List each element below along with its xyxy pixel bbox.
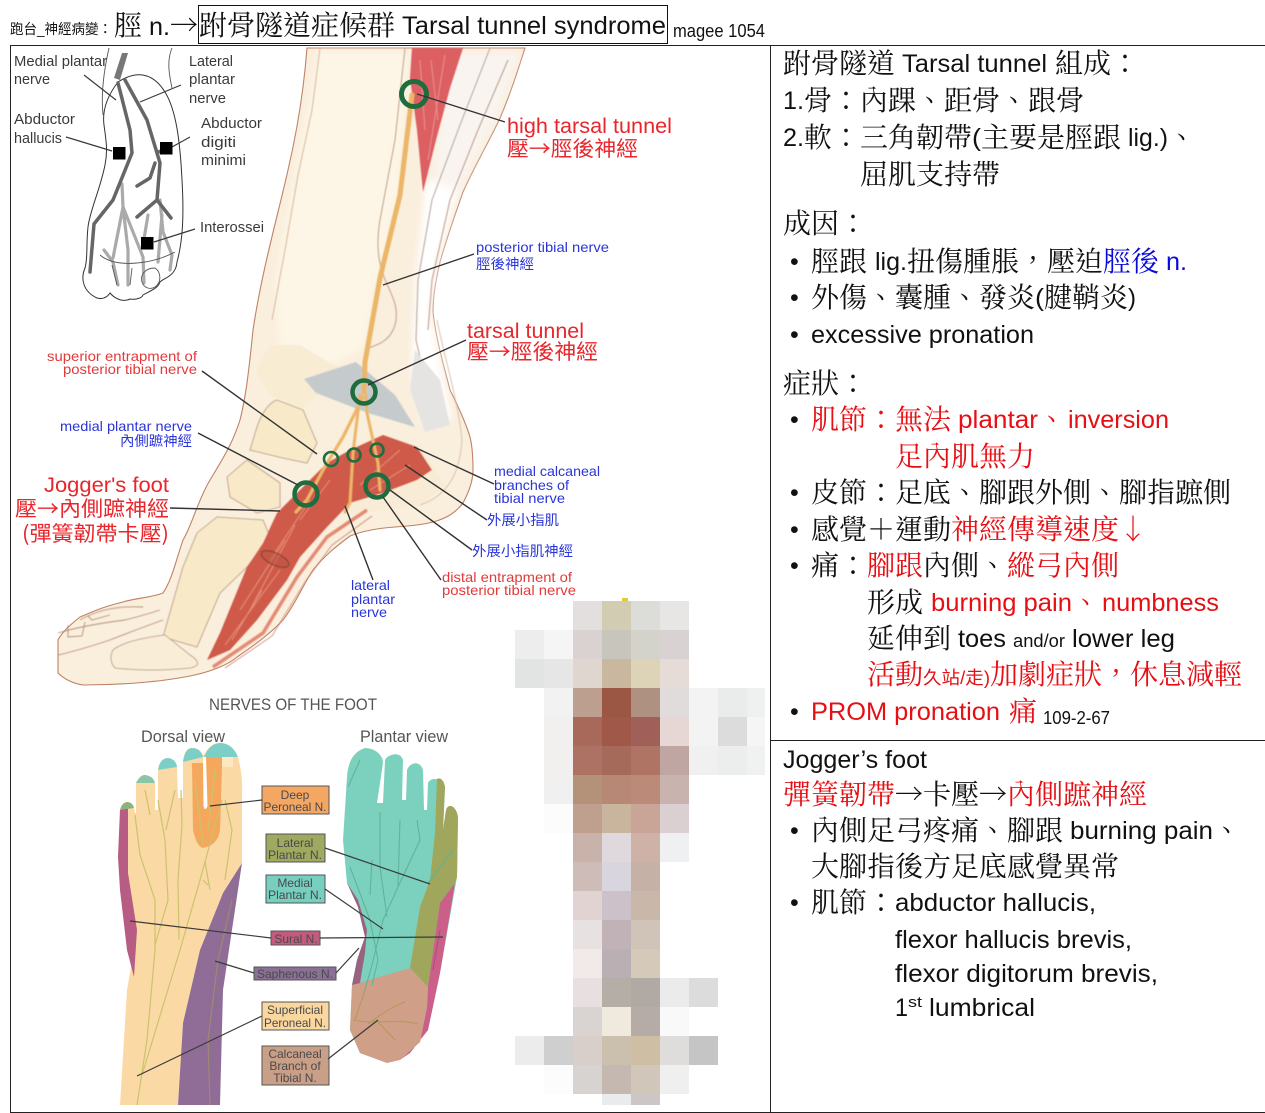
box: superficial peroneal: Superficial — [267, 1003, 323, 1017]
text: muscles: • — [790, 889, 799, 917]
muscle markers — [113, 142, 172, 250]
label: Jogger's foot — [15, 474, 169, 548]
panel: left illustrations — [14, 48, 765, 1105]
muscle: abductor hallucis — [207, 435, 432, 660]
label: medial calcaneal branches: tibial nerve — [494, 490, 565, 506]
label: Jogger's foot: 壓→內側蹠神經 — [15, 493, 169, 523]
text: pain: • — [790, 817, 799, 845]
foot and leg silhouette — [58, 48, 525, 685]
header title line: n. — [149, 13, 170, 41]
label: abductor digiti minimi: digiti — [201, 134, 236, 151]
box: superficial peroneal: Peroneal N. — [264, 1016, 326, 1030]
text: composition: 跗骨隧道 — [783, 48, 895, 80]
label: superior entrapment: posterior tibial nerve — [63, 361, 197, 377]
text: symptoms: • — [790, 479, 799, 507]
text: symptoms: inversion — [1068, 406, 1169, 434]
box: medial plantar — [266, 875, 325, 903]
label: high tarsal tunnel: 壓→脛後神經 — [507, 133, 638, 163]
label: abductor digiti minimi — [201, 115, 262, 169]
label: distal entrapment: posterior tibial nerve — [442, 582, 576, 598]
header title line: 脛 — [114, 11, 142, 42]
text: symptoms: 感覺＋運動 — [811, 514, 951, 546]
text: mechanism: 內側蹠神經 — [1007, 779, 1147, 811]
text: symptoms: and/or — [1013, 631, 1065, 651]
text: mechanism: → — [979, 773, 1007, 813]
text: pain — [790, 815, 1241, 883]
text: symptoms: 109-2-67 — [1043, 708, 1110, 728]
text: composition: 組成： — [1055, 48, 1139, 80]
diagram: plantar nerve and muscle innervation — [14, 48, 264, 300]
text: symptoms: ↓ — [1119, 508, 1147, 548]
text: causes: 扭傷腫脹，壓迫 — [907, 246, 1103, 278]
entrapment circles — [294, 82, 426, 506]
label: high tarsal tunnel — [507, 115, 672, 163]
text: pain: 、 — [1213, 816, 1241, 847]
text: symptoms: 活動 — [867, 659, 923, 691]
box: calcaneal branch: Branch of — [269, 1059, 321, 1073]
header title line — [10, 4, 765, 44]
text: symptoms: 肌節：無法 — [811, 404, 952, 436]
text: symptoms: 症狀： — [783, 368, 867, 400]
label: tarsal tunnel: 壓→脛後神經 — [467, 336, 598, 366]
label: high tarsal tunnel: high tarsal tunnel — [507, 115, 672, 138]
label: medial plantar nerve — [14, 53, 107, 88]
label: distal entrapment — [442, 569, 576, 598]
text: symptoms: 腳跟 — [867, 551, 923, 582]
text: mechanism: 彈簧韌帶 — [783, 779, 895, 811]
text: pain: 大腳指後方足底感覺異常 — [811, 851, 1119, 883]
header title line: → — [170, 4, 198, 44]
text: symptoms: 神經傳導速度 — [951, 514, 1119, 546]
label: posterior tibial nerve — [476, 239, 609, 272]
text: symptoms: • — [790, 406, 799, 434]
text: causes: 脛跟 — [811, 247, 867, 278]
text: composition: 屈肌支持帶 — [860, 159, 1000, 191]
box: medial plantar: Medial — [277, 876, 313, 890]
text: causes: • — [790, 321, 799, 349]
text: pain: 內側足弓疼痛、腳跟 — [811, 815, 1063, 847]
text: muscles: st — [908, 994, 923, 1011]
box: lateral plantar — [266, 834, 325, 862]
label: abductor digiti minimi: 外展小指肌 — [487, 512, 559, 528]
text: symptoms: 、 — [1038, 405, 1066, 436]
label: posterior tibial nerve: 脛後神經 — [476, 256, 534, 272]
box: deep peroneal: Deep — [281, 788, 310, 802]
box: superficial peroneal — [262, 1002, 329, 1030]
text: mechanism — [783, 773, 1147, 813]
text: heading: Jogger’s foot — [783, 746, 927, 774]
foot sketch outline and nerves — [83, 48, 183, 300]
text: composition: 1. — [783, 87, 804, 115]
text: symptoms: 痛： — [811, 550, 867, 582]
text: muscles: flexor digitorum brevis, — [895, 960, 1158, 988]
text: muscles: flexor hallucis brevis, — [895, 926, 1132, 954]
label: abductor hallucis: Abductor — [14, 111, 75, 128]
label: abductor hallucis: hallucis — [14, 130, 62, 147]
label: medial plantar nerve — [60, 418, 192, 449]
text: symptoms: 、 — [1072, 588, 1100, 619]
box: lateral plantar: Lateral — [277, 836, 313, 850]
box: saphenous: Saphenous N. — [257, 967, 333, 981]
label: interossei: Interossei — [200, 219, 264, 236]
header title line: Tarsal tunnel syndrome — [402, 12, 666, 40]
label: Jogger's foot: Jogger's foot — [44, 474, 169, 497]
text: composition: 軟：三角韌帶 — [804, 122, 972, 154]
label: posterior tibial nerve: posterior tibial nerve — [476, 239, 609, 255]
muscle: upper calf — [410, 48, 463, 192]
text: composition: lig.) — [1128, 124, 1168, 152]
text: causes: n. — [1166, 248, 1187, 276]
text: causes: excessive pronation — [811, 321, 1034, 349]
label: lateral plantar nerve: nerve — [351, 604, 387, 620]
text: symptoms: 延伸到 — [867, 623, 951, 655]
text: symptoms: lower leg — [1072, 625, 1175, 653]
label: superior entrapment — [47, 348, 197, 377]
label: medial calcaneal branches — [494, 463, 600, 506]
text: composition — [783, 48, 1196, 191]
text: pain: burning pain — [1070, 817, 1213, 845]
label: lateral plantar nerve: plantar — [189, 71, 235, 88]
text: symptoms: 痛 — [1009, 696, 1037, 728]
text: causes: 外傷、囊腫、發炎 — [811, 282, 1035, 314]
text: symptoms — [783, 368, 1242, 728]
text: symptoms: • — [790, 698, 799, 726]
box: medial plantar: Plantar N. — [268, 888, 322, 902]
nerve: posterior tibial — [296, 95, 412, 512]
text: symptoms: numbness — [1102, 589, 1219, 617]
text: composition: ( — [972, 124, 982, 152]
retinaculum — [304, 362, 415, 427]
text: causes: 腱鞘炎 — [1044, 282, 1128, 314]
text: causes: ) — [1128, 284, 1136, 312]
text: causes: • — [790, 284, 799, 312]
text: symptoms: plantar — [958, 406, 1038, 434]
text: composition: 、 — [1168, 123, 1196, 154]
label: lateral plantar nerve: nerve — [189, 90, 226, 107]
text: mechanism: 卡壓 — [923, 779, 979, 811]
text: symptoms: • — [790, 516, 799, 544]
text: symptoms: 久站/走) — [923, 668, 990, 688]
text: causes: 脛後 — [1103, 246, 1159, 278]
header title line: magee 1054 — [673, 21, 765, 41]
text: symptoms: PROM pronation — [811, 698, 1000, 726]
box: calcaneal branch: Calcaneal — [268, 1047, 322, 1061]
label: Jogger's foot: (彈簧韌帶卡壓) — [22, 518, 169, 548]
text: composition: Tarsal tunnel — [902, 50, 1047, 78]
text panel: tarsal tunnel composition, causes, symptoms — [783, 48, 1242, 728]
label: medial plantar nerve: nerve — [14, 71, 50, 88]
illustration: medial foot anatomy — [15, 48, 672, 685]
text: muscles: 1 — [895, 994, 908, 1022]
label: lateral plantar nerve: Lateral — [189, 53, 233, 70]
leader lines — [66, 75, 195, 242]
label: abductor digiti minimi: Abductor — [201, 115, 262, 132]
label: medial plantar nerve: 內側蹠神經 — [120, 433, 192, 449]
text: symptoms: 足內肌無力 — [895, 441, 1035, 473]
text: composition: 骨：內踝、距骨、跟骨 — [804, 85, 1084, 117]
text: symptoms: 皮節：足底、腳跟外側、腳指蹠側 — [811, 477, 1231, 509]
text: muscles: 肌節： — [811, 887, 895, 919]
label: distal entrapment: distal entrapment of — [442, 569, 572, 585]
box: calcaneal branch: Tibial N. — [273, 1071, 317, 1085]
foot: plantar view — [343, 748, 458, 1063]
text: symptoms: 內側、 — [923, 550, 1007, 582]
diagram: nerves of the foot — [118, 695, 458, 1105]
text: composition: 2. — [783, 124, 804, 152]
label: tarsal tunnel: tarsal tunnel — [467, 320, 584, 343]
label: lateral plantar nerve — [189, 53, 235, 107]
text: symptoms: toes — [958, 625, 1006, 653]
header title line: 跑台_神經病變： — [10, 21, 112, 37]
pixelated mosaic — [515, 598, 765, 1105]
box: calcaneal branch — [262, 1046, 329, 1085]
text: composition: 主要是脛跟 — [981, 122, 1121, 154]
header title line: 跗骨隧道症候群 — [199, 10, 395, 42]
text: symptoms: • — [790, 552, 799, 580]
foot: dorsal view — [118, 743, 242, 1105]
text: causes: lig. — [875, 248, 907, 276]
text: causes: ( — [1035, 284, 1045, 312]
bones: ankle and midfoot — [58, 345, 445, 670]
text: mechanism: → — [895, 773, 923, 813]
box: lateral plantar: Plantar N. — [268, 848, 322, 862]
text: symptoms: 形成 — [867, 587, 923, 619]
label: lateral plantar nerve: plantar — [351, 591, 395, 607]
soft shading inside leg — [275, 52, 520, 425]
text: muscles: abductor hallucis, — [895, 889, 1096, 917]
heading: dorsal view: Dorsal view — [141, 727, 226, 746]
leader lines — [130, 800, 443, 1076]
box: sural: Sural N. — [274, 932, 318, 946]
leader lines — [170, 94, 505, 580]
text: muscles — [790, 887, 1158, 1022]
label: medial calcaneal branches: medial calcaneal — [494, 463, 600, 479]
text: causes: 成因： — [783, 208, 867, 240]
box: deep peroneal — [262, 786, 329, 814]
label: medial plantar nerve: Medial plantar — [14, 53, 107, 70]
label: superior entrapment: superior entrapment of — [47, 348, 197, 364]
heading: plantar view: Plantar view — [360, 727, 449, 746]
text: causes — [783, 208, 1187, 349]
label: medial calcaneal branches: branches of — [494, 477, 569, 493]
text panel: Jogger's foot — [783, 746, 1241, 1022]
label: tarsal tunnel — [467, 320, 598, 366]
label: abductor hallucis — [14, 111, 75, 147]
text: symptoms: 加劇症狀，休息減輕 — [990, 659, 1242, 691]
box: deep peroneal: Peroneal N. — [264, 800, 326, 814]
label: lateral plantar nerve: lateral — [351, 577, 390, 593]
label: medial plantar nerve: medial plantar nerve — [60, 418, 192, 434]
label: abductor digiti minimi nerve: 外展小指肌神經 — [472, 543, 573, 559]
text: symptoms: 縱弓內側 — [1007, 550, 1119, 582]
heading: nerves of the foot: NERVES OF THE FOOT — [209, 695, 377, 714]
text: muscles: lumbrical — [929, 994, 1035, 1022]
label: abductor digiti minimi: minimi — [201, 152, 246, 169]
text: symptoms: burning pain — [931, 589, 1072, 617]
label: lateral plantar nerve — [351, 577, 395, 620]
text: causes: • — [790, 248, 799, 276]
